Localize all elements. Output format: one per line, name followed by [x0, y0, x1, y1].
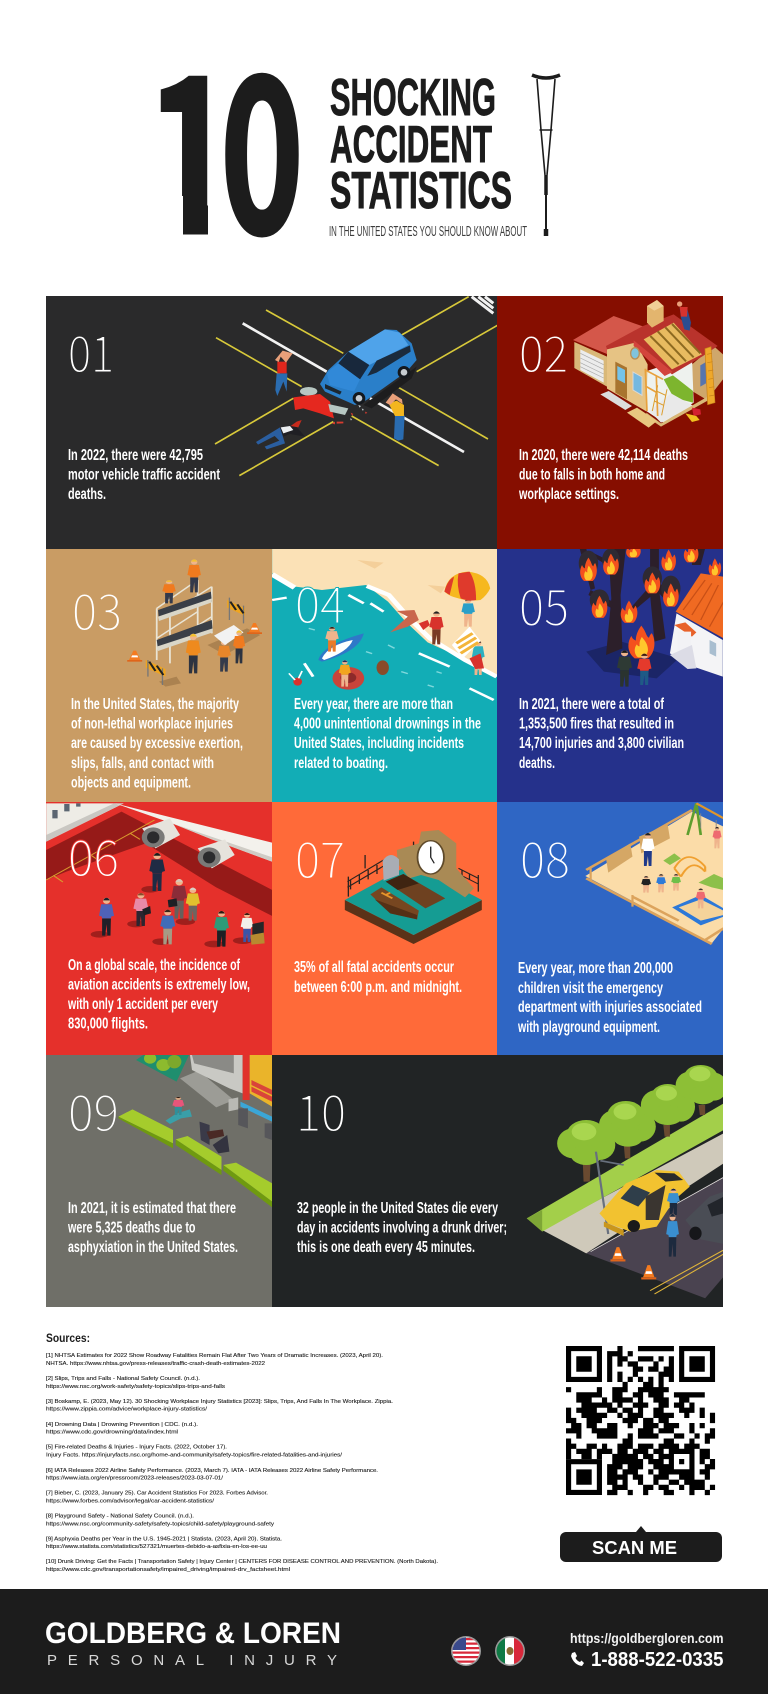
CPR figures — [166, 1097, 192, 1124]
beach umbrella — [444, 572, 490, 601]
stat text: asphyxiation in the United States. — [68, 1239, 238, 1256]
sources list: https://www.forbes.com/advisor/legal/car-accident-statistics/ — [46, 1499, 214, 1505]
green hedge barrier — [118, 1109, 272, 1207]
illustration: airplane and passengers — [46, 803, 272, 947]
sources list: [5] Fire-related Deaths & Injuries - Injury Facts. (2022, October 17). — [46, 1445, 227, 1451]
illustration: burning forest and house — [579, 544, 724, 687]
sources list: [10] Drunk Driving: Get the Facts | Transportation Safety | Injury Center | CENTERS FOR DISEASE CONTROL AND PREVENTION. (North Dakota). — [46, 1559, 438, 1565]
lifeguard chair — [452, 599, 480, 658]
panel 07: time of day — [272, 802, 497, 1055]
stat text: objects and equipment. — [71, 774, 191, 792]
stat text: of non-lethal workplace injuries — [71, 716, 233, 732]
stat text — [68, 447, 220, 503]
stat text — [67, 957, 250, 1032]
stat text — [71, 696, 243, 792]
panel 06: aviation — [46, 802, 272, 1055]
traffic cones — [127, 623, 262, 662]
stat text: In 2020, there were 42,114 deaths — [519, 447, 688, 464]
stat text: are caused by excessive exertion, — [71, 735, 243, 752]
number 01: 01 — [68, 315, 114, 387]
beach people — [390, 610, 485, 675]
stat text: 4,000 unintentional drownings in the — [294, 716, 481, 732]
stat text: In 2021, it is estimated that there — [68, 1200, 236, 1217]
police officers — [666, 1189, 680, 1257]
stat text: deaths. — [68, 486, 106, 503]
illustration: playground — [585, 803, 724, 944]
logo — [45, 1617, 341, 1669]
number 02: 02 — [519, 315, 568, 387]
number 03: 03 — [72, 573, 122, 645]
sources list — [46, 1353, 438, 1573]
panel 09: asphyxiation — [46, 1053, 272, 1307]
stat text: slips, falls, and contact with — [71, 755, 214, 772]
traffic cones — [610, 1247, 656, 1279]
stat text — [294, 959, 462, 996]
scan me button: SCAN ME — [592, 1538, 677, 1558]
stat text: children visit the emergency — [518, 980, 663, 997]
sources list: Injury Facts. https://injuryfacts.nsc.org/home-and-community/safety-topics/fire-related-fatalities-and-injuries/ — [46, 1452, 342, 1458]
stat text: with only 1 accident per every — [67, 996, 218, 1013]
stat text: were 5,325 deaths due to — [67, 1220, 196, 1236]
stat text — [519, 696, 684, 772]
sources list: [2] Slips, Trips and Falls - National Safety Council. (n.d.). — [46, 1376, 200, 1382]
sources — [46, 1333, 438, 1573]
number 07: 07 — [295, 821, 345, 893]
sources list: https://www.zippia.com/advice/workplace-injury-statistics/ — [46, 1407, 207, 1413]
stat text: Every year, there are more than — [294, 696, 453, 713]
panel 02: falls — [497, 296, 723, 549]
stat text: 14,700 injuries and 3,800 civilian — [519, 735, 684, 752]
stat text: In 2022, there were 42,795 — [68, 447, 203, 464]
stat text: 32 people in the United States die every — [297, 1200, 498, 1217]
subtitle: IN THE UNITED STATES YOU SHOULD KNOW ABOUT — [329, 224, 527, 240]
icon: US flag — [451, 1636, 481, 1666]
stat text — [518, 447, 688, 503]
stat text — [297, 1200, 507, 1256]
luggage — [142, 898, 265, 945]
black car — [685, 1192, 724, 1244]
illustration: house under repair — [573, 300, 723, 428]
row of trees — [557, 1065, 727, 1182]
sources list: [7] Bieber, C. (2023, January 25). Car Accident Statistics For 2023. Forbes Advisor. — [46, 1491, 268, 1497]
illustration: beach and swimmers — [272, 548, 498, 700]
stat text — [517, 960, 702, 1036]
title block — [140, 0, 560, 296]
stat text: Every year, more than 200,000 — [518, 960, 673, 977]
stat text: United States, including incidents — [294, 735, 464, 752]
swimmer in red ring — [332, 660, 364, 690]
icon: phone — [571, 1652, 584, 1666]
sources list: [6] IATA Releases 2022 Airline Safety Performance. (2023, March 7). IATA - IATA Releases 2022 Airline Safety Performance. — [46, 1468, 378, 1474]
panel 05: fires — [497, 544, 724, 802]
ornate clock — [397, 830, 474, 897]
number 08: 08 — [520, 821, 570, 893]
stat text: deaths. — [519, 755, 555, 772]
sources list: [3] Boskamp, E. (2023, May 12). 30 Shocking Workplace Injury Statistics [2023]: Slips, Trips, And Falls In The Workplace. Zippia. — [46, 1399, 393, 1405]
play equipment and mats — [663, 853, 724, 890]
title words: SHOCKING — [330, 69, 496, 127]
number 09: 09 — [68, 1074, 119, 1146]
stat text: day in accidents involving a drunk driver; — [297, 1220, 507, 1236]
stat text: 1,353,500 fires that resulted in — [519, 716, 674, 732]
icon: Mexico flag — [495, 1636, 525, 1666]
panel 04: drownings — [272, 548, 498, 802]
people fleeing — [617, 650, 651, 687]
logo: PERSONAL INJURY — [47, 1652, 337, 1669]
swing set — [688, 803, 724, 837]
scan me button — [560, 1526, 722, 1562]
stat text: between 6:00 p.m. and midnight. — [294, 979, 462, 996]
sources list: https://www.nsc.org/work-safety/safety-topics/slips-trips-and-falls — [46, 1384, 225, 1390]
man in red shirt — [275, 351, 293, 396]
street lamp — [596, 1152, 624, 1234]
stat text: related to boating. — [294, 755, 388, 772]
cafe table and chairs — [199, 1122, 229, 1153]
stat text: aviation accidents is extremely low, — [68, 976, 250, 994]
QR code — [566, 1346, 715, 1495]
illustration: car and motorcycle crash — [215, 297, 498, 476]
title words — [330, 69, 512, 220]
stat text — [67, 1200, 238, 1256]
house with orange roof — [670, 573, 724, 677]
stat text: On a global scale, the incidence of — [68, 957, 241, 974]
contact details: https://goldbergloren.com — [570, 1630, 724, 1646]
other swimmers — [289, 660, 389, 686]
man in yellow shirt — [386, 393, 405, 441]
sandbox — [672, 895, 724, 925]
sources list: [4] Drowning Data | Drowning Prevention | CDC. (n.d.). — [46, 1422, 198, 1428]
coffin — [370, 887, 419, 919]
stat text: due to falls in both home and — [519, 466, 665, 484]
stat text: In 2021, there were a total of — [519, 696, 665, 713]
contact details: 1-888-522-0335 — [591, 1649, 724, 1671]
passengers — [99, 853, 253, 947]
stat text — [294, 696, 481, 772]
number 10: 10 — [296, 1074, 346, 1146]
panel 03: workplace injuries — [46, 549, 272, 802]
sources list: [1] NHTSA Estimates for 2022 Show Roadway Fatalities Remain Flat After Two Years of Dramatic Increases. (2023, April 20). — [46, 1353, 383, 1359]
sources list: [9] Asphyxia Deaths per Year in the U.S. 1945-2021 | Statista. (2023, April 20). Statista. — [46, 1536, 282, 1542]
illustration: grave and clock — [345, 830, 482, 944]
contact details — [570, 1630, 724, 1671]
cemetery fences — [347, 842, 478, 897]
stat text: this is one death every 45 minutes. — [297, 1239, 475, 1256]
icon: crutch — [532, 75, 560, 236]
panel 10: drunk driving — [272, 1055, 727, 1307]
number 05: 05 — [519, 568, 569, 640]
road barriers — [146, 598, 245, 685]
sources list: https://www.cdc.gov/transportationsafety/impaired_driving/impaired-drv_factsheet.html — [46, 1567, 290, 1573]
illustration: roadside crash with police — [527, 1065, 727, 1298]
surfer — [318, 627, 364, 662]
sources list: https://www.cdc.gov/drowning/data/index.html — [46, 1430, 178, 1436]
jet engines — [142, 818, 235, 868]
stat text: 35% of all fatal accidents occur — [294, 959, 454, 976]
yellow crashed car — [599, 1170, 690, 1236]
sources list: NHTSA. https://www.nhtsa.gov/press-releases/traffic-crash-death-estimates-2022 — [46, 1361, 265, 1367]
panel 08: playground — [497, 802, 724, 1055]
benches — [606, 825, 670, 873]
panel 01: motor vehicle deaths — [46, 296, 498, 549]
worker on roof — [677, 301, 691, 331]
number 06: 06 — [68, 819, 119, 891]
sources list: https://www.iata.org/en/pressroom/2023-releases/2023-03-07-01/ — [46, 1476, 223, 1482]
sources heading: Sources: — [46, 1333, 90, 1345]
flames — [580, 544, 721, 658]
sources list: https://www.statista.com/statistics/527321/muertes-debido-a-asfixia-en-los-ee-uu — [46, 1544, 267, 1550]
illustration: scaffolding and workers — [127, 559, 262, 687]
tombstone — [383, 855, 399, 881]
title words: STATISTICS — [330, 162, 512, 220]
stat text: 830,000 flights. — [68, 1016, 148, 1032]
number 04: 04 — [295, 566, 345, 638]
open grave — [386, 874, 445, 908]
stat text: with playground equipment. — [517, 1019, 660, 1036]
sources list: [8] Playground Safety - National Safety Council. (n.d.). — [46, 1514, 194, 1520]
stat text: workplace settings. — [518, 486, 619, 503]
logo: GOLDBERG & LOREN — [45, 1617, 341, 1650]
person lying on the road — [256, 420, 305, 449]
illustration: street scene with CPR — [118, 1053, 272, 1207]
sources list: https://www.nsc.org/community-safety/safety-topics/child-safety/playground-safety — [46, 1521, 274, 1527]
children and adult — [641, 827, 722, 908]
stat text: In the United States, the majority — [71, 696, 239, 713]
title words: ACCIDENT — [330, 116, 492, 174]
footer — [0, 1589, 768, 1694]
stat text: motor vehicle traffic accident — [68, 466, 220, 484]
